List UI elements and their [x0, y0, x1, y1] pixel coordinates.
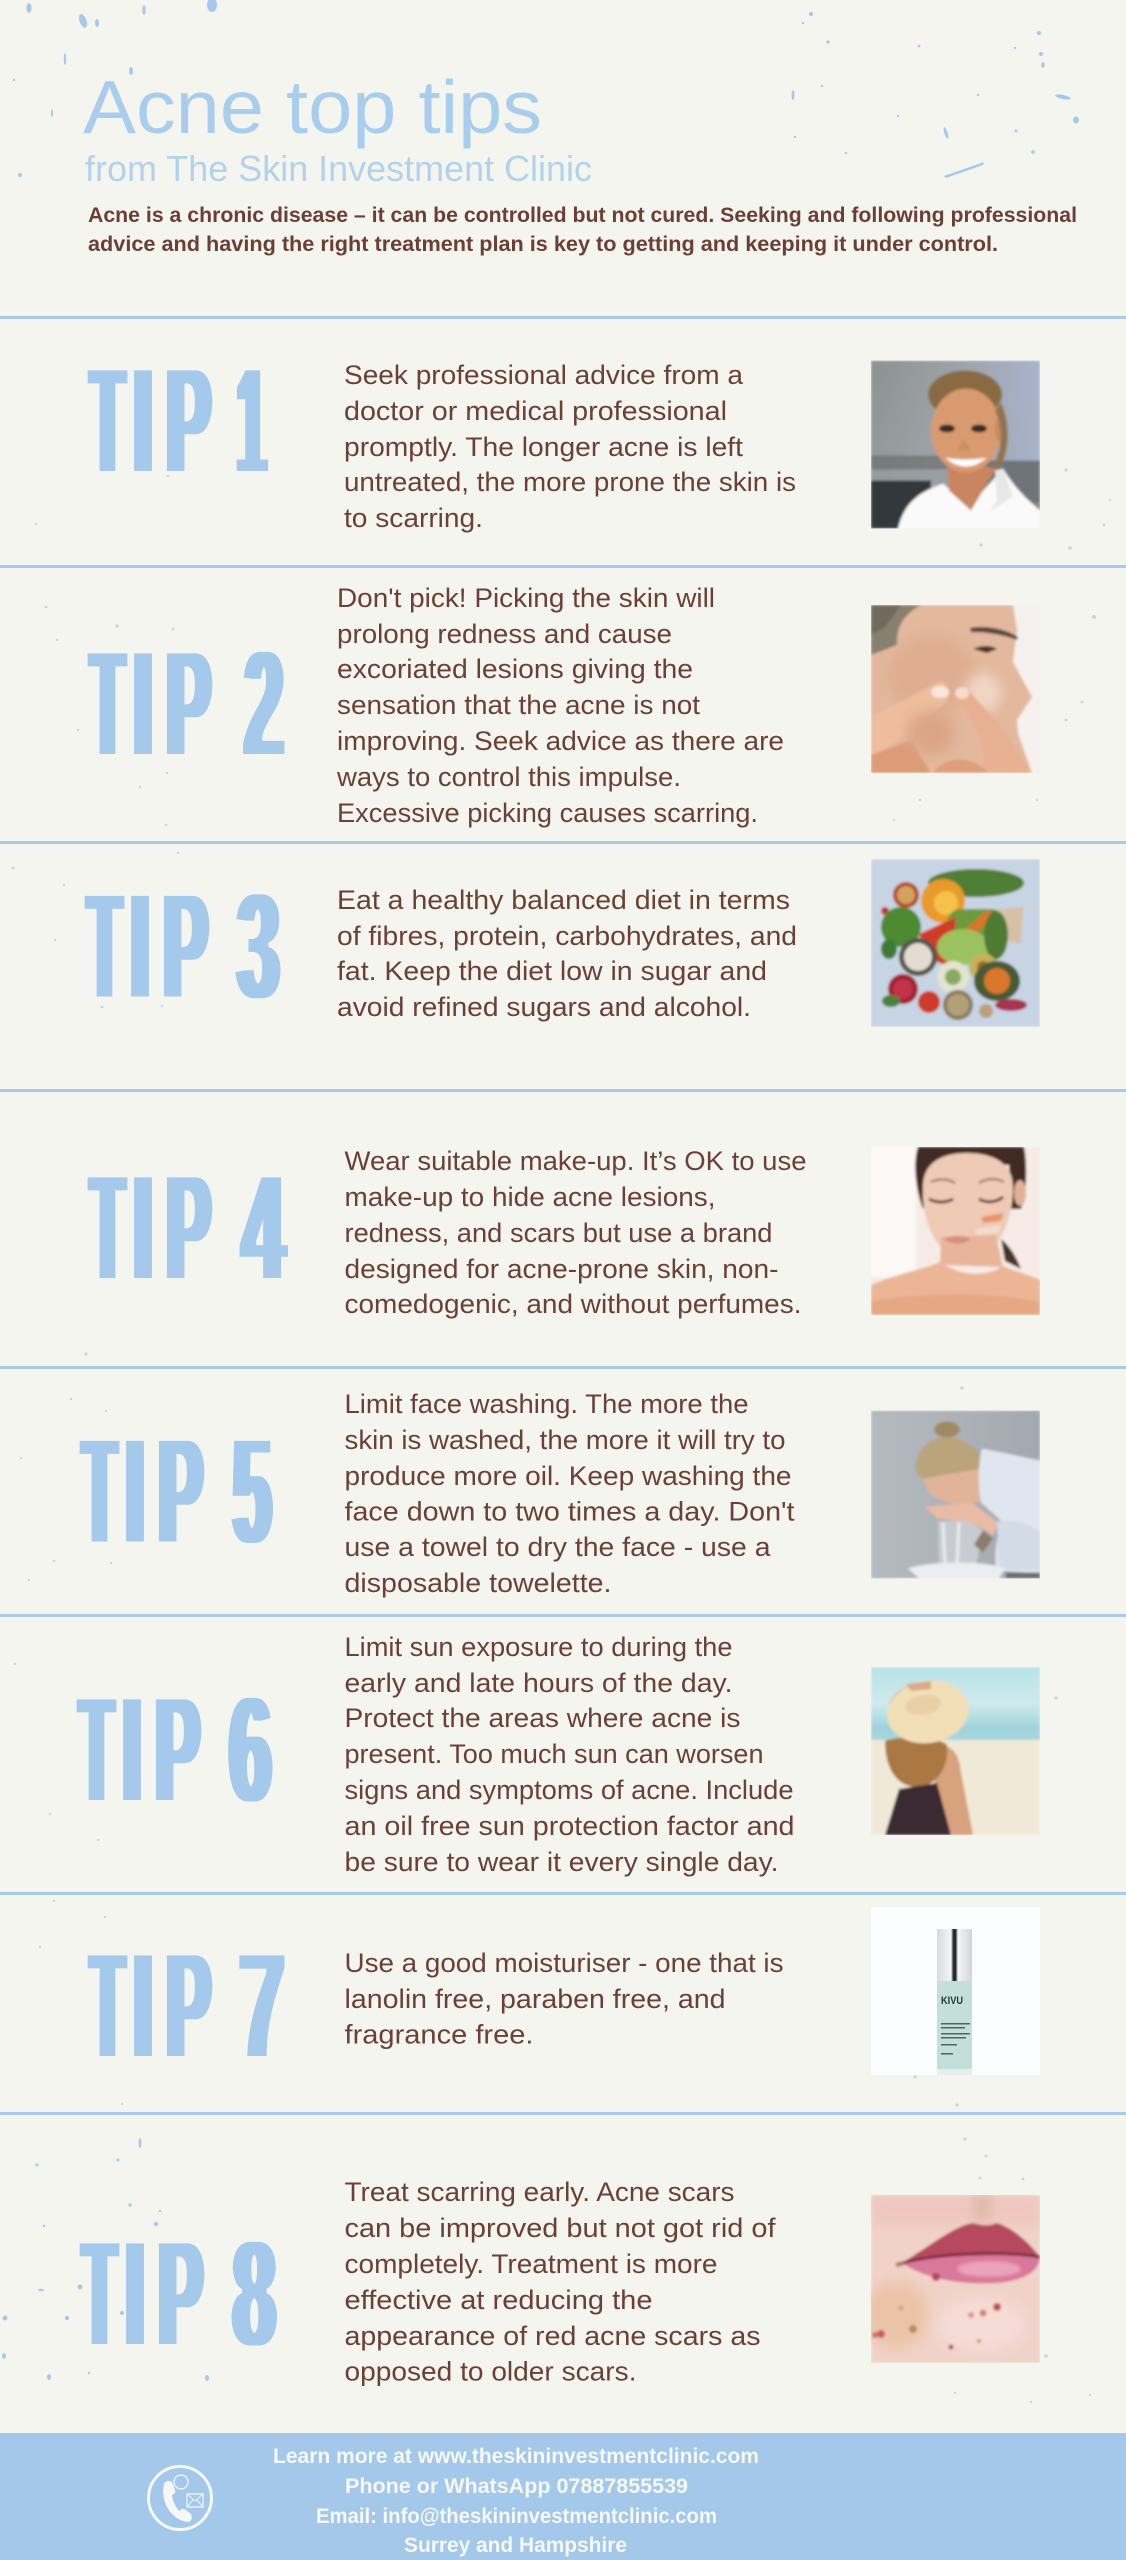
- introduction text: advice and having the right treatment plan is key to getting and keeping it under control.: [88, 233, 998, 256]
- photo: woman in a sun hat at the beach: [871, 1667, 1040, 1835]
- photo: KIVU moisturiser bottle: [871, 1907, 1040, 2075]
- tip 5 text: disposable towelette.: [344, 1568, 612, 1598]
- tip 5 text: face down to two times a day. Don't: [344, 1496, 795, 1526]
- tip 6 text: [344, 1632, 794, 1877]
- panel: tip 2: [91, 583, 1040, 828]
- tip 2 text: ways to control this impulse.: [336, 762, 681, 792]
- tip 5 heading: T: [83, 1406, 116, 1576]
- footer band: [0, 2433, 1126, 2560]
- tip 7 text: Use a good moisturiser - one that is: [344, 1948, 784, 1978]
- tip 8 heading: I: [126, 2209, 144, 2379]
- tip 2 text: improving. Seek advice as there are: [337, 726, 784, 756]
- tip 1 text: to scarring.: [344, 503, 483, 533]
- tip 8 heading: T: [83, 2209, 116, 2379]
- tip 4 text: designed for acne-prone skin, non-: [344, 1254, 778, 1284]
- tip 8 text: [344, 2177, 776, 2386]
- tip 1 heading: P: [166, 336, 210, 506]
- tip 2 text: sensation that the acne is not: [337, 690, 701, 720]
- tip 7 text: [344, 1948, 784, 2050]
- tip 1 heading: I: [134, 336, 152, 506]
- photo: healthy food bowls: [871, 859, 1040, 1027]
- panel: tip 1: [88, 360, 1040, 532]
- photo: fingers squeezing a spot on the cheek: [871, 605, 1034, 773]
- contact details: [273, 2445, 759, 2557]
- contact details: Email: info@theskininvestmentclinic.com: [316, 2505, 717, 2528]
- tip 8 text: completely. Treatment is more: [344, 2249, 718, 2279]
- panel: tip 7: [91, 1907, 1040, 2091]
- panel: tip 2: 2: [245, 619, 283, 789]
- panel: tip 4: 4: [242, 1143, 284, 1313]
- tip 5 text: produce more oil. Keep washing the: [344, 1461, 792, 1491]
- tip 4 heading: P: [166, 1143, 210, 1313]
- tip 5 text: Limit face washing. The more the: [344, 1389, 748, 1419]
- panel: tip 3: 3: [237, 862, 279, 1032]
- tip 6 text: Protect the areas where acne is: [344, 1703, 740, 1733]
- contact details: Phone or WhatsApp 07887855539: [345, 2475, 688, 2498]
- tip 6 text: present. Too much sun can worsen: [344, 1739, 764, 1769]
- tip 1 text: untreated, the more prone the skin is: [344, 467, 796, 497]
- tip 8 text: effective at reducing the: [344, 2285, 652, 2315]
- tip 5 heading: P: [158, 1406, 202, 1576]
- photo: smiling clinician in white coat: [871, 360, 1040, 528]
- tip 2 text: excoriated lesions giving the: [337, 654, 693, 684]
- tip 7 heading: T: [91, 1921, 124, 2091]
- introduction text: Acne is a chronic disease – it can be controlled but not cured. Seeking and following professional: [88, 204, 1077, 227]
- tip 2 text: prolong redness and cause: [337, 619, 672, 649]
- tip 8 heading: P: [158, 2209, 202, 2379]
- tip 8 text: opposed to older scars.: [344, 2356, 636, 2386]
- tip 2 heading: I: [134, 619, 152, 789]
- tip 6 text: early and late hours of the day.: [344, 1668, 732, 1698]
- photo: lips and chin with acne spots: [871, 2195, 1040, 2363]
- tip 6 text: signs and symptoms of acne. Include: [344, 1775, 794, 1805]
- tip 7 text: lanolin free, paraben free, and: [344, 1984, 726, 2014]
- photo: KIVU moisturiser bottle: KIVU: [941, 1995, 963, 2007]
- tip 6 heading: I: [122, 1665, 142, 1835]
- tip 1 text: doctor or medical professional: [344, 396, 727, 426]
- tip 8 text: appearance of red acne scars as: [344, 2321, 760, 2351]
- tip 7 heading: I: [134, 1921, 152, 2091]
- subtitle: from The Skin Investment Clinic: [85, 148, 592, 189]
- tip 2 text: Excessive picking causes scarring.: [337, 798, 758, 828]
- tip 4 heading: I: [134, 1143, 152, 1313]
- panel: tip 5: [83, 1389, 1040, 1598]
- title: Acne top tips: [83, 65, 542, 149]
- tip 3 heading: T: [88, 862, 121, 1032]
- tip 7 heading: 7: [240, 1921, 284, 2091]
- tip 8 text: Treat scarring early. Acne scars: [344, 2177, 734, 2207]
- tip 4 text: [344, 1146, 806, 1319]
- tip 4 text: Wear suitable make-up. It’s OK to use: [344, 1146, 806, 1176]
- tip 3 text: Eat a healthy balanced diet in terms: [337, 885, 790, 915]
- tip 3 text: fat. Keep the diet low in sugar and: [337, 956, 767, 986]
- tip 4 text: comedogenic, and without perfumes.: [344, 1289, 802, 1319]
- panel: tip 3: [88, 859, 1040, 1032]
- header: title and introduction: [83, 65, 1077, 256]
- tip 7 text: fragrance free.: [344, 2020, 534, 2050]
- tip 3 heading: I: [130, 862, 150, 1032]
- tip 3 text: [337, 885, 797, 1022]
- photo: woman rinsing her face over a basin: [871, 1410, 1040, 1578]
- tip 1 heading: T: [91, 336, 124, 506]
- photo: woman with make-up swatch on cheek: [871, 1147, 1040, 1315]
- tip 1 text: Seek professional advice from a: [344, 360, 744, 390]
- tip 8 text: can be improved but not got rid of: [344, 2213, 776, 2243]
- panel: tip 1: 1: [238, 336, 266, 506]
- contact details: Learn more at www.theskininvestmentclinic.com: [273, 2445, 759, 2468]
- tip 1 text: [344, 360, 796, 533]
- panel: tip 6: [80, 1632, 1040, 1877]
- tip 3 text: avoid refined sugars and alcohol.: [337, 992, 751, 1022]
- tip 5 text: skin is washed, the more it will try to: [344, 1425, 786, 1455]
- tip 4 text: redness, and scars but use a brand: [344, 1218, 772, 1248]
- tip 3 heading: P: [164, 862, 206, 1032]
- tip 6 heading: P: [156, 1665, 198, 1835]
- tip 2 heading: T: [91, 619, 124, 789]
- tip 2 text: Don't pick! Picking the skin will: [337, 583, 715, 613]
- tip 4 text: make-up to hide acne lesions,: [344, 1182, 716, 1212]
- tip 5 heading: I: [126, 1406, 144, 1576]
- tip 6 text: an oil free sun protection factor and: [344, 1811, 794, 1841]
- tip 2 heading: P: [166, 619, 210, 789]
- tip 2 text: [336, 583, 784, 828]
- tip 4 heading: T: [91, 1143, 124, 1313]
- introduction text: [88, 204, 1077, 256]
- tip 1 text: promptly. The longer acne is left: [344, 432, 744, 462]
- panel: tip 6: 6: [229, 1665, 271, 1835]
- icon: phone, chat and mail badge: [148, 2466, 212, 2530]
- tip 8 heading: 8: [233, 2209, 276, 2379]
- panel: tip 4: [91, 1143, 1040, 1319]
- tip 3 text: of fibres, protein, carbohydrates, and: [337, 921, 797, 951]
- panel: tip 8: [83, 2177, 1040, 2386]
- contact details: Surrey and Hampshire: [404, 2534, 627, 2557]
- panel: tip 5: 5: [233, 1406, 271, 1576]
- tip 6 text: be sure to wear it every single day.: [344, 1847, 778, 1877]
- tip 6 heading: T: [80, 1665, 113, 1835]
- tip 7 heading: P: [166, 1921, 210, 2091]
- tip 5 text: [344, 1389, 795, 1598]
- tip 5 text: use a towel to dry the face - use a: [344, 1532, 772, 1562]
- tip 6 text: Limit sun exposure to during the: [344, 1632, 732, 1662]
